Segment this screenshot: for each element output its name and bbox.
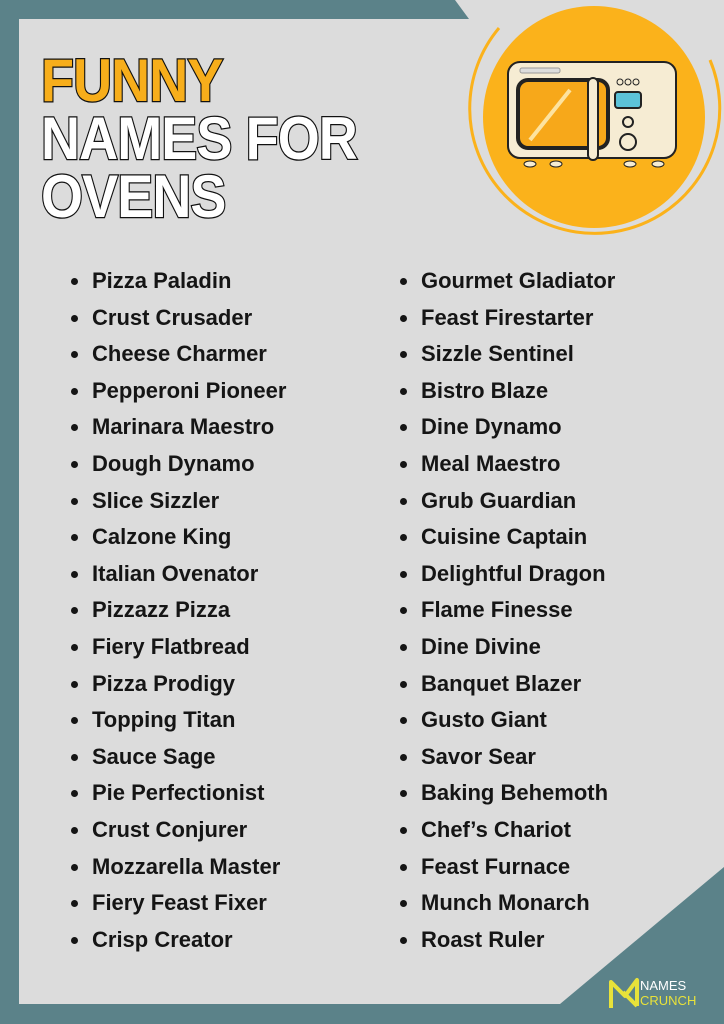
title: OVENS — [41, 163, 226, 230]
list: right column: Meal Maestro — [421, 451, 560, 476]
list: left column — [71, 268, 286, 952]
list: right column: Cuisine Captain — [421, 524, 587, 549]
list: right column: Feast Furnace — [421, 854, 570, 878]
list: right column: Munch Monarch — [421, 890, 590, 915]
logo: names crunch: CRUNCH — [640, 993, 696, 1008]
list: right column — [400, 268, 615, 952]
list: left column: Pizzazz Pizza — [92, 597, 230, 622]
list: left column: Crisp Creator — [92, 927, 233, 952]
list: right column: Sizzle Sentinel — [421, 341, 574, 366]
list: left column: Calzone King — [92, 524, 231, 549]
list: left column: Crust Conjurer — [92, 817, 247, 842]
list: right column: Delightful Dragon — [421, 561, 606, 586]
list: right column: Banquet Blazer — [421, 671, 581, 696]
title — [41, 47, 359, 230]
icon: microwave in yellow circle — [468, 6, 722, 235]
list: left column: Sauce Sage — [92, 744, 216, 769]
list: left column: Fiery Flatbread — [92, 634, 250, 659]
list: left column: Mozzarella Master — [92, 854, 280, 878]
list: right column: Feast Firestarter — [421, 305, 593, 330]
list: right column: Flame Finesse — [421, 597, 573, 622]
logo: names crunch: NAMES — [640, 978, 686, 993]
list: right column: Gourmet Gladiator — [421, 268, 615, 293]
list: right column: Chef’s Chariot — [421, 817, 571, 842]
list: left column: Fiery Feast Fixer — [92, 890, 267, 915]
list: right column: Gusto Giant — [421, 707, 547, 732]
list: left column: Pizza Paladin — [92, 268, 231, 293]
list: right column: Savor Sear — [421, 744, 536, 769]
list: left column: Pizza Prodigy — [92, 671, 235, 696]
list: left column: Slice Sizzler — [92, 488, 219, 513]
list: left column: Marinara Maestro — [92, 414, 274, 439]
list: right column: Baking Behemoth — [421, 780, 608, 805]
list: left column: Crust Crusader — [92, 305, 252, 330]
list: left column: Italian Ovenator — [92, 561, 258, 586]
title: NAMES FOR — [41, 105, 357, 172]
list: right column: Bistro Blaze — [421, 378, 548, 403]
list: left column: Pepperoni Pioneer — [92, 378, 286, 403]
list: right column: Grub Guardian — [421, 488, 576, 513]
list: right column: Dine Dynamo — [421, 414, 562, 439]
logo: names crunch — [609, 978, 696, 1008]
list: left column: Topping Titan — [92, 707, 235, 732]
list: right column: Dine Divine — [421, 634, 541, 659]
title: FUNNY — [41, 47, 223, 114]
list: left column: Cheese Charmer — [92, 341, 267, 366]
list: left column: Pie Perfectionist — [92, 780, 264, 805]
list: left column: Dough Dynamo — [92, 451, 255, 476]
list: right column: Roast Ruler — [421, 927, 544, 952]
